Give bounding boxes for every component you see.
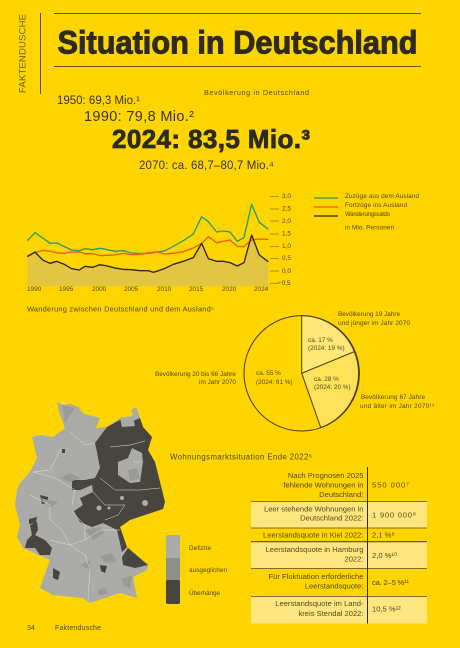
map legend: Überhänge [189, 589, 220, 597]
pie labels: im Jahr 2070 [199, 379, 236, 386]
2024: 2024: 83,5 Mio.³ [112, 124, 310, 154]
x axis labels: 2024 [254, 286, 269, 293]
table right values [372, 480, 416, 614]
y axis labels: 3,0 [282, 193, 291, 200]
population figures [57, 88, 310, 172]
pie labels: Bevölkerung 19 Jahre [338, 311, 400, 318]
pie labels: ca. 17 % [308, 337, 333, 344]
table left labels: Leerstandsquote in Hamburg [266, 545, 364, 554]
pie labels: (2024: 20 %) [314, 384, 351, 391]
chart legend: in Mio. Personen [345, 224, 394, 232]
x axis labels: 1995 [59, 286, 74, 293]
y axis labels: 1,0 [282, 243, 291, 250]
x axis labels: 1990 [27, 286, 42, 293]
pie labels: Bevölkerung 67 Jahre [361, 394, 425, 401]
pie labels: (2024: 19 %) [308, 345, 345, 352]
table right values: 10,5 %¹² [372, 604, 401, 614]
y axis ticks [270, 196, 279, 284]
chart caption: Wanderung zwischen Deutschland und dem Ausland⁵ [27, 304, 214, 314]
map: surplus patches [25, 449, 148, 580]
x axis labels [27, 286, 269, 293]
table left labels: kreis Stendal 2022: [298, 609, 364, 618]
pie: 28 percent [302, 352, 359, 428]
pie labels: ca. 55 % [256, 370, 281, 377]
table right values: 550 000⁷ [372, 480, 409, 490]
pie labels: und jünger im Jahr 2070 [338, 320, 410, 327]
legend swatch stack [166, 535, 180, 604]
x axis labels: 2005 [124, 286, 139, 293]
population caption: Bevölkerung in Deutschland [204, 88, 309, 97]
map: light spots in the east [96, 496, 148, 510]
map: surplus regions east [72, 418, 165, 552]
table right values: ca. 2–5 %¹¹ [372, 578, 409, 587]
footer: page number: 34 [27, 625, 35, 632]
table left labels [263, 471, 364, 618]
y axis labels [278, 193, 291, 287]
pie labels [155, 311, 434, 410]
header rules [40, 13, 421, 94]
table left labels: Für Fluktuation erforderliche [269, 572, 364, 581]
chart legend: Fortzüge ins Ausland [345, 202, 407, 209]
table rules [251, 467, 427, 624]
pie labels: ca. 28 % [314, 376, 339, 383]
y axis labels: 0,5 [282, 255, 291, 262]
table: housing market [251, 467, 427, 624]
chart legend [314, 193, 419, 232]
x axis labels: 2020 [222, 286, 237, 293]
map: Germany housing market [15, 402, 165, 603]
table left labels: fehlende Wohnungen in [283, 480, 364, 490]
y axis labels: 1,5 [282, 230, 291, 238]
table right values: 2,1 %⁹ [372, 530, 395, 540]
table right values: 2,0 %¹⁰ [372, 551, 397, 560]
pie chart: age groups [244, 316, 359, 431]
map: state borders [30, 432, 160, 600]
pie labels: (2024: 61 %) [256, 379, 293, 386]
line chart: migration [27, 193, 291, 293]
pie labels: und älter im Jahr 2070¹³ [360, 403, 434, 410]
y axis labels: −0,5 [278, 280, 291, 287]
table left labels: Deutschland: [319, 490, 364, 499]
chart legend: Wanderungssaldo [345, 212, 391, 218]
2070: 2070: ca. 68,7–80,7 Mio.⁴ [139, 160, 274, 172]
hatched area [27, 235, 268, 286]
map: light patches east [118, 416, 143, 483]
title: Situation in Deutschland [58, 24, 418, 60]
map legend [166, 535, 227, 604]
y axis labels: 2,0 [282, 218, 291, 225]
table left labels: Leerstandsquote im Land- [275, 599, 364, 608]
pie: 17 percent [302, 316, 354, 373]
table caption: Wohnungsmarktsituation Ende 2022⁶ [170, 452, 312, 462]
y axis labels: 0,0 [282, 268, 291, 275]
table left labels: Leerstandsquote in Kiel 2022: [263, 530, 364, 540]
legend labels: Defizite [189, 545, 211, 552]
1950: 1950: 69,3 Mio.¹ [57, 95, 140, 107]
map base: deficit regions [15, 402, 165, 603]
y axis labels: 2,5 [282, 206, 291, 212]
footer: section name: Faktendusche [55, 625, 101, 632]
map: balanced patches [40, 405, 140, 595]
table right values: 1 900 000⁸ [372, 510, 416, 520]
x axis labels: 2010 [157, 286, 172, 293]
x axis labels: 2000 [92, 286, 107, 293]
1990: 1990: 79,8 Mio.² [84, 109, 194, 125]
map legend: ausgeglichen [189, 567, 227, 574]
table left labels: Leer stehende Wohnungen in [264, 504, 364, 514]
chart legend: Zuzüge aus dem Ausland [345, 193, 419, 200]
section label: Faktendusche: FAKTENDUSCHE [18, 14, 28, 93]
table left labels: Nach Prognosen 2025 [288, 471, 364, 480]
pie: 55 percent [244, 316, 359, 431]
table left labels: Leerstandsquote: [305, 582, 364, 590]
table left labels: 2022: [344, 554, 364, 564]
x axis labels: 2015 [189, 286, 204, 293]
series lines [27, 204, 268, 272]
table left labels: Deutschland 2022: [300, 514, 364, 522]
pie labels: Bevölkerung 20 bis 66 Jahre [155, 371, 236, 378]
table row bands [251, 502, 427, 624]
